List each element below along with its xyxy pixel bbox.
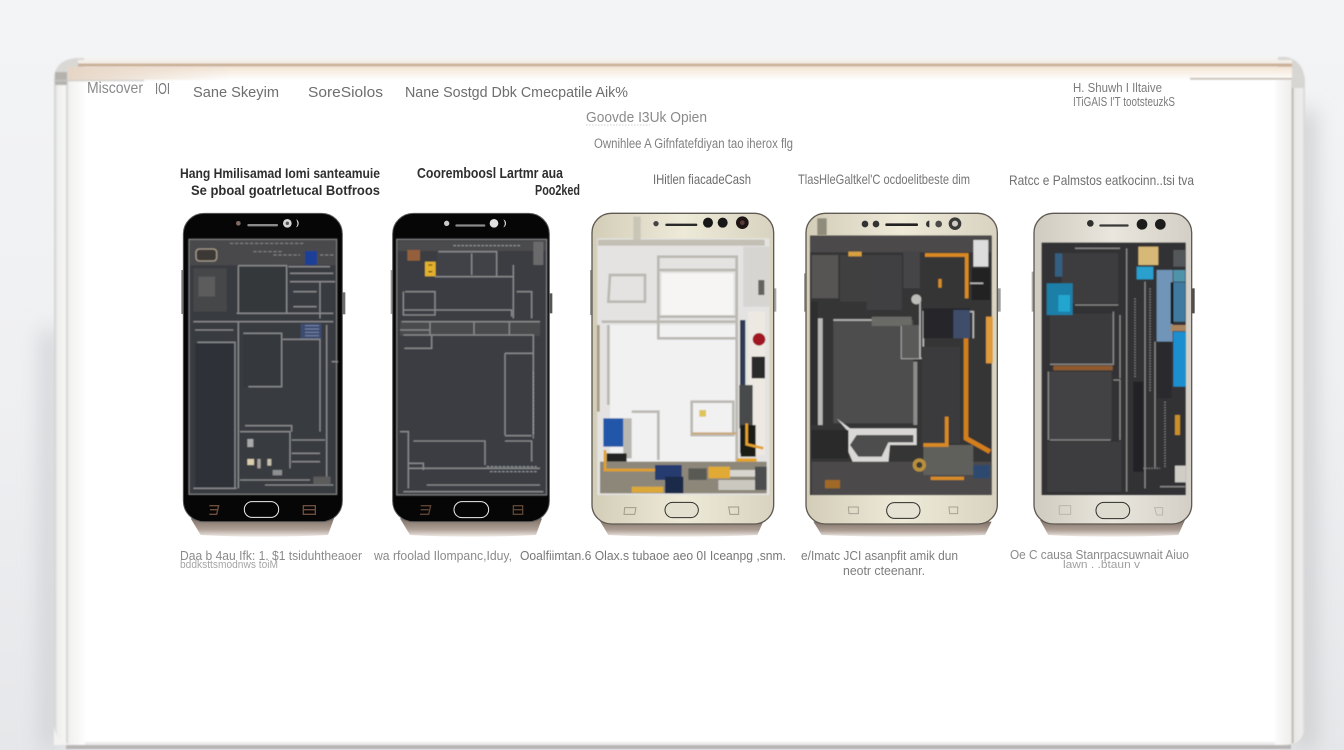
caption 1 xyxy=(180,549,362,571)
caption 2: wa rfoolad Ilompanc,Iduy, xyxy=(373,549,512,563)
phone 5: silver with dark board and blue panels xyxy=(1032,213,1195,537)
top navigation labels: Miscover xyxy=(87,80,144,97)
caption 5: Oe C causa Stanrpacsuwnait Aiuo xyxy=(1010,548,1189,562)
heading 3: IHitlen fiacadeCash xyxy=(653,171,751,187)
heading 5: Ratcc e Palmstos eatkocinn..tsi tva xyxy=(1009,172,1194,188)
heading 2: Cooremboosl Lartmr aua xyxy=(417,166,564,182)
top right note xyxy=(1073,80,1175,109)
caption 1: Daa b 4au Ifk: 1. $1 tsiduhtheaoer xyxy=(180,549,362,563)
top navigation labels xyxy=(87,80,628,101)
centre subtitle: Goovde I3Uk Opien xyxy=(586,109,707,126)
heading 2: Poo2ked xyxy=(535,183,580,199)
column headings xyxy=(180,165,1194,199)
caption 4: neotr cteenanr. xyxy=(843,564,925,578)
top navigation labels: SoreSiolos xyxy=(308,84,383,101)
top navigation labels: Nane Sostgd Dbk Cmecpatile Aik% xyxy=(405,84,628,101)
phone 2: dark board xyxy=(391,213,552,537)
phone captions xyxy=(180,548,1189,578)
heading 1 xyxy=(180,165,380,198)
heading 4: TlasHleGaltkel'C ocdoelitbeste dim xyxy=(798,171,970,187)
caption 5: lawn . .btaun v xyxy=(1063,559,1141,571)
phone 4: cream with dark board and orange traces xyxy=(804,213,1001,537)
heading 1: Hang Hmilisamad Iomi santeamuie xyxy=(180,165,380,181)
centre subtitle: Ownihlee A Gifnfatefdiyan tao iherox flg xyxy=(594,136,793,151)
caption 5 xyxy=(1010,548,1189,571)
heading 1: Se pboal goatrletucal Botfroos xyxy=(191,182,380,198)
phone 3: cream with light board xyxy=(590,213,776,537)
heading 2 xyxy=(417,166,580,199)
caption 1: bddksttsmodnws toiM xyxy=(180,559,278,571)
caption 4: e/Imatc JCI asanpfit amik dun xyxy=(801,549,958,563)
top right note: ITiGAIS I'T tootsteuzkS xyxy=(1073,94,1175,109)
caption 3: Ooalfiimtan.6 Olax.s tubaoe aeo 0I Iceanpg ,snm. xyxy=(520,549,786,563)
centre subtitle xyxy=(586,109,793,151)
top right note: H. Shuwh I Iltaive xyxy=(1073,80,1162,95)
caption 4 xyxy=(801,549,958,578)
top navigation labels: Sane Skeyim xyxy=(193,84,279,101)
top navigation labels: IOI xyxy=(155,81,170,98)
phone 1: dark board xyxy=(181,213,345,537)
